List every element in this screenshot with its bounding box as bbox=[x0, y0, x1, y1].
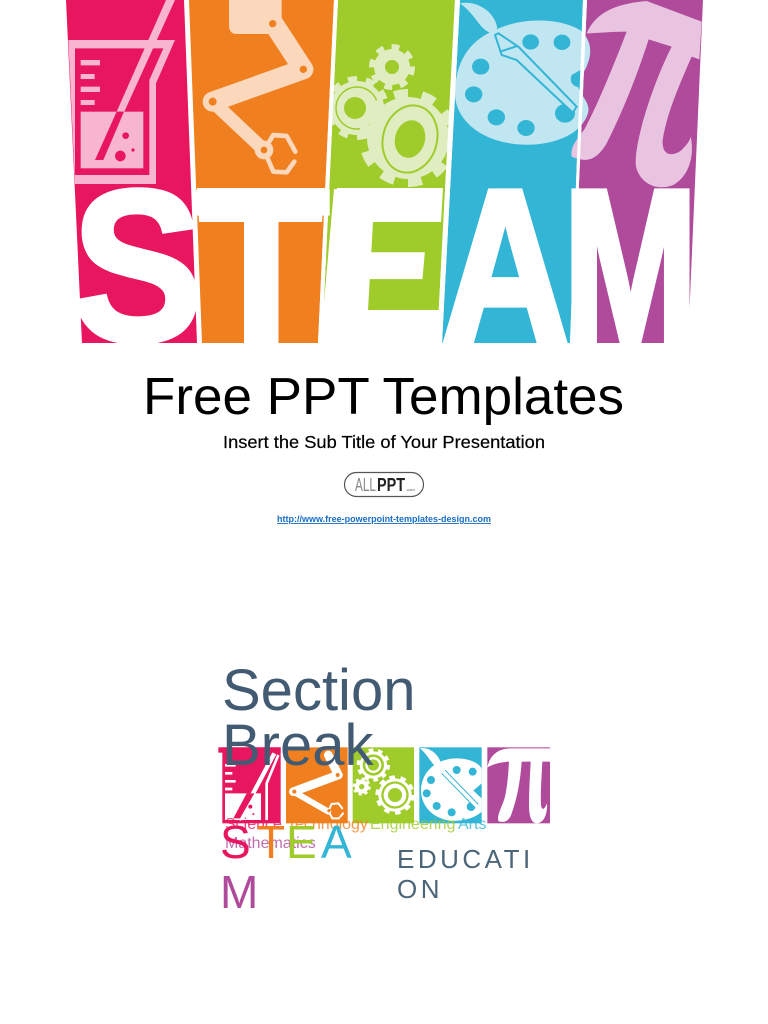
icon: pi symbol bbox=[571, 1, 702, 187]
letter A: A bbox=[441, 145, 570, 390]
tile: arts bbox=[419, 747, 482, 823]
gear: top bbox=[372, 47, 412, 87]
gear: left bbox=[328, 79, 386, 137]
wordmark: STEAM: M bbox=[220, 866, 258, 918]
section title: Break bbox=[222, 713, 375, 778]
title: Free PPT Templates bbox=[143, 368, 624, 426]
page canvas bbox=[66, 0, 703, 908]
tile: technology bbox=[286, 747, 348, 823]
hero banner: STEAM coloured bands bbox=[66, 0, 703, 343]
icon: robot arm bbox=[209, 0, 307, 172]
gear: small bbox=[354, 779, 369, 794]
logo: ALLPPT: ALL bbox=[355, 475, 376, 495]
paint brush bbox=[460, 3, 577, 113]
letter S: S bbox=[72, 146, 203, 386]
letter E: E bbox=[305, 144, 450, 391]
section title: Section bbox=[222, 658, 415, 723]
wordmark: EDUCATION: ON bbox=[397, 874, 443, 904]
letter T: T bbox=[191, 142, 331, 390]
wordmark: STEAM: S bbox=[220, 816, 251, 868]
tile: science bbox=[218, 747, 281, 823]
wordmark: STEAM: T bbox=[257, 816, 285, 868]
logo: ALLPPT: .com bbox=[406, 487, 415, 492]
band: purple bbox=[572, 0, 703, 343]
icon: beaker bbox=[68, 0, 175, 184]
gear: large bbox=[364, 94, 452, 182]
link url: http://www.free-powerpoint-templates-design.com bbox=[277, 514, 491, 524]
subtitle: Insert the Sub Title of Your Presentation bbox=[223, 432, 545, 452]
tile: mathematics bbox=[487, 747, 550, 823]
wordmark: STEAM: A bbox=[321, 816, 352, 868]
letter M: M bbox=[563, 144, 698, 390]
tile: engineering bbox=[353, 747, 414, 823]
section subtitle: disciplines: Science bbox=[225, 816, 282, 833]
band: green bbox=[322, 0, 455, 343]
band gaps bbox=[318, 0, 587, 343]
section subtitle: disciplines: Arts bbox=[458, 816, 486, 833]
bottom logo: STEAM icon tiles bbox=[218, 747, 550, 823]
band: pink bbox=[66, 0, 197, 343]
wordmark: STEAM: E bbox=[286, 816, 317, 868]
wordmark: STEAM bbox=[220, 816, 352, 918]
heading letters: STEAM bbox=[72, 142, 698, 391]
section subtitle: disciplines: Mathematics bbox=[225, 835, 316, 852]
section subtitle: disciplines: Technology bbox=[287, 816, 368, 833]
logo: ALLPPT bbox=[344, 472, 424, 496]
section subtitle: disciplines: Engineering bbox=[370, 816, 455, 833]
logo: ALLPPT: PPT bbox=[377, 475, 405, 495]
band: orange bbox=[189, 0, 334, 343]
icon: paint palette bbox=[455, 3, 590, 145]
gear: large bbox=[377, 777, 413, 813]
band: blue bbox=[442, 0, 583, 343]
wordmark: EDUCATION: EDUCATI bbox=[397, 844, 534, 874]
icon: gears bbox=[328, 47, 452, 182]
gear: top bbox=[358, 750, 388, 780]
